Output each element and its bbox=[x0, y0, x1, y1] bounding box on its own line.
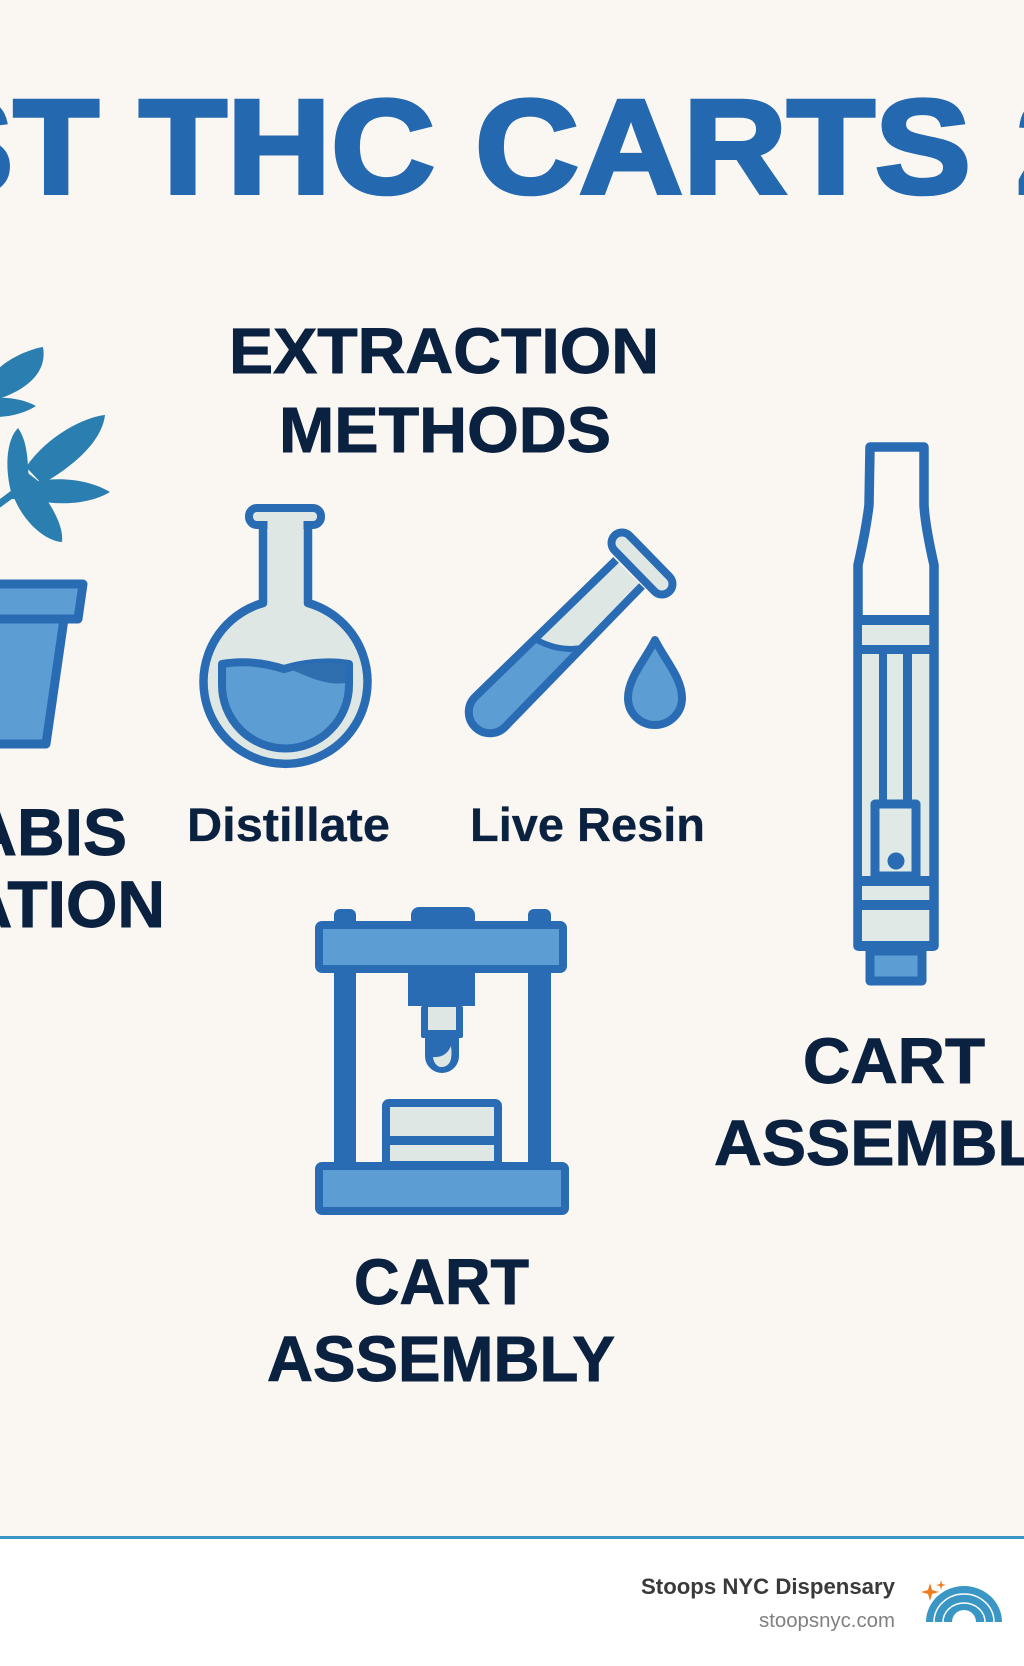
heading: extraction methods: EXTRACTION bbox=[229, 315, 659, 387]
label: live resin: Live Resin bbox=[470, 798, 705, 851]
footer website: stoopsnyc.com bbox=[759, 1610, 895, 1632]
flask liquid bbox=[222, 662, 349, 748]
heading: cart assembly center: ASSEMBLY bbox=[267, 1323, 615, 1395]
heading: cart assembly right bbox=[714, 1025, 1024, 1179]
label: distillate: Distillate bbox=[187, 798, 390, 851]
heading: extraction methods bbox=[229, 315, 659, 466]
title: THC CARTS bbox=[139, 73, 971, 222]
pot bbox=[0, 584, 83, 744]
press nozzle drop bbox=[429, 1036, 455, 1069]
logo: rainbow with sparkles bbox=[921, 1580, 1002, 1622]
icon: vape cartridge bbox=[858, 447, 934, 981]
press top bar bbox=[319, 925, 563, 969]
heading: cart assembly center bbox=[267, 1246, 615, 1395]
cartridge block bbox=[386, 1103, 498, 1165]
icon: cannabis plant in pot bbox=[0, 347, 110, 744]
heading: cannabis cultivation bbox=[0, 795, 165, 941]
icon: round flask bbox=[203, 508, 368, 764]
cartridge tip bbox=[870, 951, 922, 981]
icon: cart press machine bbox=[319, 907, 565, 1211]
heading: cart assembly center: CART bbox=[354, 1246, 529, 1318]
heading: cart assembly right: CART bbox=[803, 1025, 985, 1097]
press base bbox=[319, 1166, 565, 1211]
footer bbox=[0, 1536, 1024, 1666]
heading: extraction methods: METHODS bbox=[279, 394, 611, 466]
plant leaves bbox=[0, 347, 110, 542]
footer brand name: Stoops NYC Dispensary bbox=[641, 1574, 896, 1599]
drop bbox=[628, 640, 682, 725]
icon: test tube and drop bbox=[469, 543, 682, 733]
